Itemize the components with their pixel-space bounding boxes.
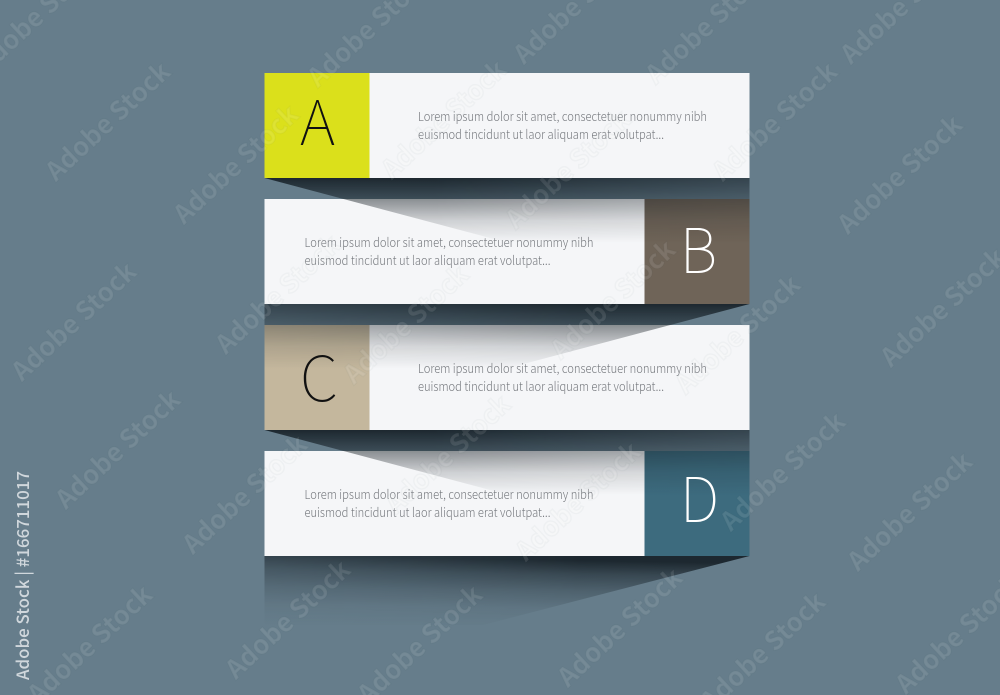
text block A	[418, 106, 707, 143]
panel C	[264, 325, 750, 430]
watermarks: Adobe Stock	[495, 100, 638, 237]
fold shadow A to B	[264, 178, 750, 243]
text block B: Lorem ipsum dolor sit amet, consectetuer nonummy nibh	[304, 232, 594, 251]
letter B: B	[680, 201, 717, 291]
watermarks: Adobe Stock	[540, 230, 683, 367]
text block C: euismod tincidunt ut laor aliquam erat volutpat...	[418, 376, 664, 395]
letter A: A	[300, 73, 335, 163]
watermarks: Adobe Stock	[45, 380, 188, 517]
text block D	[304, 484, 594, 521]
panel D	[264, 451, 750, 556]
colour block D	[644, 451, 750, 556]
text block A: euismod tincidunt ut laor aliquam erat volutpat...	[418, 124, 664, 143]
watermarks: Adobe Stock	[35, 52, 178, 189]
letter D: D	[680, 450, 719, 540]
watermarks: Adobe Stock	[333, 255, 476, 392]
colour block A	[264, 73, 370, 178]
watermarks: Adobe Stock	[1, 252, 144, 389]
fold shadow B to C	[264, 304, 750, 369]
text block B	[304, 232, 594, 269]
text block C: Lorem ipsum dolor sit amet, consectetuer nonummy nibh	[418, 358, 707, 377]
watermarks: Adobe Stock	[702, 52, 845, 189]
text block D: euismod tincidunt ut laor aliquam erat volutpat...	[304, 502, 550, 521]
watermarks: Adobe Stock	[665, 265, 808, 402]
panel A	[264, 73, 750, 178]
watermarks: Adobe Stock	[163, 95, 306, 232]
watermarks: Adobe Stock	[710, 402, 853, 539]
text block D: Lorem ipsum dolor sit amet, consectetuer nonummy nibh	[304, 484, 594, 503]
watermarks: Adobe Stock	[827, 105, 970, 242]
colour block C	[264, 325, 370, 430]
panel B	[264, 199, 750, 304]
watermarks: Adobe Stock	[205, 225, 348, 362]
fold shadow below D	[264, 556, 750, 611]
letter C: C	[300, 329, 338, 419]
watermarks: Adobe Stock	[375, 385, 518, 522]
watermarks: Adobe Stock	[837, 442, 980, 579]
watermarks: Adobe Stock	[172, 425, 315, 562]
text block B: euismod tincidunt ut laor aliquam erat volutpat...	[304, 250, 550, 269]
watermarks: Adobe Stock	[215, 550, 358, 687]
watermarks: Adobe Stock	[547, 558, 690, 695]
colour block B	[644, 199, 750, 304]
fold shadow C to D	[264, 430, 750, 495]
watermarks: Adobe Stock	[371, 50, 514, 187]
text block A: Lorem ipsum dolor sit amet, consectetuer nonummy nibh	[418, 106, 707, 125]
watermarks: Adobe Stock	[505, 432, 648, 569]
text block C	[418, 358, 707, 395]
side credit: Adobe Stock | #166711017	[9, 471, 34, 680]
